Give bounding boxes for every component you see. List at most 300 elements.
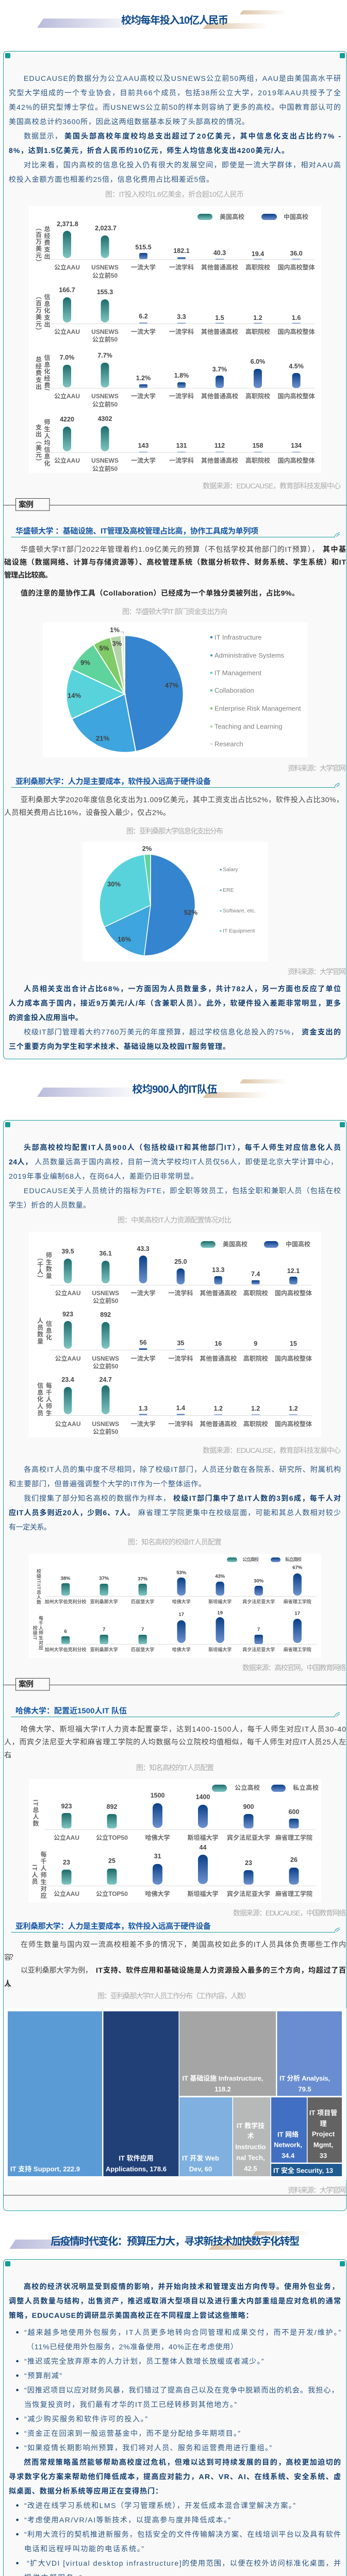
bars: IT staff per thousand: 1.2 <box>251 1405 260 1412</box>
bars: IT staff numbers: 923 <box>62 1311 73 1318</box>
bars: IT spending per person: 4220 <box>60 416 74 423</box>
legend: 美国高校 <box>220 213 244 221</box>
cell: software applications: IT 软件应用 <box>119 2155 154 2162</box>
bars: IT staff per thousand: 26 <box>290 1856 298 1863</box>
bars: IT staff numbers: 一流学科 <box>168 1354 193 1362</box>
bars: IT staff numbers: 人员数量 <box>37 1317 44 1345</box>
case divider: 案例 <box>19 1680 34 1689</box>
source note: 数据来源：EDUCAUSE，教育部科技发展中心 <box>203 482 341 490</box>
cell: infrastructure <box>179 2011 276 2096</box>
bullet list: coping strategies <box>16 2328 341 2452</box>
bars: total spending: 一流大学 <box>131 263 156 271</box>
bars: total spending: USNEWS <box>91 264 119 271</box>
bars: total spending: 36.0 <box>290 250 303 257</box>
chart caption: 图：知名高校的校级IT人员配置 <box>128 1538 222 1546</box>
bars: IT share of total spending <box>35 352 315 408</box>
bullet list: new technology uses: “改进在线学习系统和LMS（学习管理系统），开发低成本混合课堂解决方案。” <box>24 2501 295 2510</box>
intro text block: 数据显示， <box>24 132 62 140</box>
bars: IT share of total spending: 其他普通高校 <box>201 392 238 400</box>
case text: University of Washington: 值的注意的是协作工具（Collaboration）已经成为一个单独分类被列出，占比9%。 <box>21 589 299 597</box>
bars: central IT per thousand: 17 <box>178 1612 184 1618</box>
bars: IT staff per thousand: 1.4 <box>176 1404 185 1412</box>
cell: instructional tech: 术 <box>247 2132 254 2140</box>
staffing concentration text: 我们搜集了部分知名高校的数据作为样本， <box>24 1494 170 1502</box>
bars: total IT staff: 公立AAU <box>54 1834 79 1841</box>
bars: central IT share <box>36 1565 317 1605</box>
bars: IT share of total spending: 1.2% <box>136 375 151 382</box>
bars: total spending: 19.4 <box>252 250 264 258</box>
bars: IT share of total spending: 3.7% <box>212 366 227 373</box>
bars: IT staff numbers: 892 <box>100 1311 111 1318</box>
bars: IT staff per thousand: 国内高校整体 <box>275 1420 312 1428</box>
bars: total spending: 2,371.8 <box>57 221 78 228</box>
section heading: post-pandemic changes <box>9 2231 310 2250</box>
intro text block: 美42%的研究型博士学位。而USNEWS公立前50的样本则容纳了更多的高校。中国教育部认可的 <box>9 103 341 111</box>
bars: IT staff numbers: 信息化 <box>45 1320 52 1341</box>
bars: total IT staff <box>32 1792 317 1841</box>
bars: IT spending: 高职院校 <box>245 328 270 335</box>
pie legend: Salary <box>223 867 239 873</box>
bars: IT staff numbers: 56 <box>140 1339 147 1346</box>
intro text block: 高校的经济状况明显受到疫情的影响，并开始向技术和管理支出方向传导。使用外包业务， <box>24 2282 339 2291</box>
bullet list: coping strategies: “越来越多地使用外包服务，IT人员更多地转向合同管理和成果交付，而不是开发/维护。” <box>24 2328 341 2336</box>
bullet list: coping strategies: 当恢复投资时，我们最有才华的IT员工已经转移到其他地方。” <box>24 2400 237 2409</box>
bars: IT staff numbers: 公立AAU <box>55 1354 80 1362</box>
intro text block: 学生）折合的人员数量。 <box>9 1201 90 1209</box>
bars: IT spending: 公立AAU <box>54 328 80 335</box>
bars: staff and student numbers: USNEWS <box>92 1290 119 1297</box>
intro text block: EDUCAUSE关于人员统计的指标为FTE，即全职等效员工，包括全职和兼职人员（包括在校 <box>24 1187 341 1195</box>
chart: total IT staff at well-known universities <box>29 1779 321 1903</box>
pie legend: Teaching and Learning <box>214 722 283 731</box>
cell: software applications <box>103 2011 178 2176</box>
intro text block: 人员数量远高于国内高校，目前一流大学校均IT人员仅56人，即使是北京大学计算中心， <box>35 1158 338 1166</box>
section heading: 校均每年投入10亿人民币 <box>37 10 287 29</box>
source note: 资料来源：大学官网 <box>288 968 346 976</box>
bars: total spending: 公立AAU <box>54 263 80 271</box>
pie chart: University of Washington IT spending: 21% <box>96 735 109 742</box>
bullet list: new technology uses <box>16 2501 341 2576</box>
bars: total IT staff: 892 <box>107 1803 117 1810</box>
bars: IT spending: 166.7 <box>59 286 75 294</box>
chart: China vs US IT spending <box>29 206 321 473</box>
bars: total IT staff: IT总人数 <box>32 1800 39 1827</box>
bullet list: coping strategies: “资金正在回滚到一般运营基金中，而不是分配给多年期项目。” <box>24 2429 240 2437</box>
pie chart: University of Washington IT spending: 47% <box>165 681 178 689</box>
legend <box>212 1784 319 1792</box>
bars: IT spending <box>35 286 315 343</box>
bars: IT spending per person: 一流学科 <box>169 456 194 464</box>
bars: IT spending: 1.6 <box>292 314 301 321</box>
bars: total spending: 高职院校 <box>245 263 270 271</box>
cell: project management <box>307 2097 342 2163</box>
case text: Harvard: 人，而宾夕法尼亚大学和麻省理工学院的人均数据与公立院校均值相似，每千人师生对应IT人员25人左 <box>4 1738 346 1746</box>
intro text block: 校投入金额方面也相差约25倍，信息化费用占比相差近5倍。 <box>9 175 213 183</box>
bars: IT staff per thousand: 斯坦福大学 <box>187 1890 219 1897</box>
bars: central IT per thousand: 加州大学伯克利分校 <box>44 1647 87 1652</box>
case text: University of Arizona staffing <box>4 1940 346 1988</box>
pie chart: University of Washington IT spending <box>43 622 307 757</box>
pie chart: University of Washington IT spending: 3% <box>112 640 122 647</box>
case heading: University of Washington <box>11 527 340 537</box>
staffing concentration text: 各高校IT人员的集中度不尽相同，除了校级IT部门，人员还分散在各院系、研究所、附属机构 <box>24 1465 341 1473</box>
pie chart: University of Arizona IT spending: 16% <box>118 936 131 943</box>
bars: total IT staff: 1400 <box>196 1793 210 1801</box>
bars: central IT per thousand: 7 <box>257 1627 260 1632</box>
bars: IT staff per thousand: IT人员 <box>31 1865 38 1885</box>
pie chart: University of Washington IT spending: 14% <box>68 691 81 700</box>
bars: IT staff numbers: 15 <box>290 1340 297 1347</box>
bars: IT staff per thousand: 信息化人员 <box>37 1382 44 1417</box>
bars: IT staff numbers: 一流大学 <box>131 1354 156 1362</box>
cell: instructional tech: IT 教学技 <box>237 2122 265 2130</box>
text block: digital solutions <box>9 2458 341 2495</box>
pie legend: IT Management <box>214 669 261 677</box>
intro text block <box>9 1143 341 1209</box>
bullet list: coping strategies: “如果疫情长期影响州预算，我们将对人员、服务和运营费用进行重组。” <box>24 2444 272 2452</box>
intro text block <box>9 2282 341 2319</box>
section heading: 校均900人的IT队伍 <box>37 1079 287 1098</box>
bars: total spending: 一流学科 <box>169 263 194 271</box>
bars: IT staff per thousand: 麻省理工学院 <box>275 1890 312 1897</box>
intro text block: 美国高校总计约3600所，因此这两组数据基本反映了头部高校的情况。 <box>9 117 249 126</box>
case text: University of Arizona <box>4 795 343 817</box>
case text: University of Arizona: 亚利桑那大学2020年度信息化支出为1.009亿美元，其中工资支出占比52%，软件投入占比30%， <box>21 795 343 804</box>
bars: total IT staff: 1500 <box>151 1792 165 1799</box>
cell: project management: 理 <box>320 2120 327 2128</box>
bars: IT spending: （百万美元） <box>35 293 42 334</box>
bars: IT staff per thousand: 高职院校 <box>243 1420 268 1428</box>
bars: total IT staff: 哈佛大学 <box>145 1834 170 1841</box>
pie chart: University of Arizona IT spending: 30% <box>107 880 121 888</box>
cell: infrastructure: IT 基础设施 Infrastructure, <box>183 2074 263 2082</box>
staffing concentration text <box>9 1465 341 1531</box>
bars: central IT per thousand: 17 <box>294 1611 300 1617</box>
bars: IT share of total spending: 公立前50 <box>92 400 118 408</box>
legend <box>197 213 308 221</box>
pie legend: IT Equipment <box>223 928 255 934</box>
bars: IT staff per thousand <box>37 1376 312 1435</box>
cell: project management: 33 <box>320 2151 327 2160</box>
case text: University of Arizona staffing: 在师生数量与国内双一流高校相差不多的情况下，美国高校如此多的IT人员具体负责哪些工作内 <box>21 1940 346 1948</box>
bars: central IT share: 匹兹堡大学 <box>131 1599 154 1604</box>
intro text block: 24人， <box>9 1158 32 1166</box>
bars: central IT share: 30% <box>254 1579 264 1584</box>
chart caption: 图：知名高校的IT人员配置 <box>136 1764 214 1772</box>
bars: IT spending: 信息化支出 <box>43 293 51 328</box>
case heading: University of Arizona staffing <box>11 1922 340 1932</box>
bars: IT staff per thousand: 1.3 <box>139 1405 147 1412</box>
intro text block: 美国头部高校年度校均总支出超过了20亿美元，其中信息化支出占比约7% - <box>64 132 341 140</box>
bars: central IT share: 哈佛大学 <box>172 1599 191 1604</box>
chart caption: 图：华盛顿大学IT 部门资金支出方向 <box>122 607 227 616</box>
bars: central IT per thousand: 7 <box>103 1627 105 1632</box>
case heading: University of Arizona: 亚利桑那大学：人力是主要成本，软件投入远高于硬件设备 <box>15 777 211 786</box>
bullet list: coping strategies: “推迟或完全放弃原本的人力计划，员工整体人数增长放缓或者减少。” <box>24 2357 264 2365</box>
text block: digital solutions: 寻求数字化方案来帮助他们降低成本，提高应对能力，AR、VR、AI、在线系统、安全系统、虚 <box>9 2472 341 2481</box>
pie legend: Collaboration <box>214 686 254 694</box>
source note: 资料来源：大学官网 <box>288 2186 346 2194</box>
bars: total spending: 2,023.7 <box>95 225 117 232</box>
chart caption: 图：IT投入校均1.6亿美金，折合超10亿人民币 <box>105 190 244 198</box>
bars: IT share of total spending: 4.5% <box>289 363 304 370</box>
cell: project management: Project <box>312 2130 335 2138</box>
bars: IT spending per person: 国内高校整体 <box>278 456 315 464</box>
bars: IT spending per person: USNEWS <box>91 457 119 464</box>
cell: web development: IT 开发 Web <box>182 2155 219 2162</box>
staffing concentration text: 校级IT部门集中了总IT人数的3到6成，每千人对 <box>173 1494 341 1502</box>
case text: University of Arizona staffing: 以亚利桑那大学为例， <box>21 1966 92 1974</box>
pie legend: Research <box>214 740 243 748</box>
bars: central IT share: 53% <box>176 1570 187 1575</box>
legend: 公立高校 <box>235 1784 260 1791</box>
bars: IT staff per thousand: 44 <box>200 1844 206 1851</box>
case conclusion text: 人员相关支出合计占比68%，一方面因为人员数量多，共计782人，另一方面也反应了单位 <box>24 985 341 993</box>
cell: IT support <box>8 2011 102 2176</box>
bars: IT spending per person: 134 <box>291 442 302 449</box>
bars: central IT per thousand: 亚利桑那大学 <box>90 1647 118 1652</box>
bars: IT share of total spending: 一流学科 <box>169 392 194 400</box>
bars: staff and student numbers: 39.5 <box>61 1248 74 1255</box>
staffing concentration text: 有一定关系。 <box>9 1523 51 1531</box>
legend: 中国高校 <box>284 213 308 221</box>
bars: IT staff per thousand: 公立TOP50 <box>96 1890 128 1897</box>
case text: Harvard: 右。 <box>4 1751 15 1759</box>
bullet list: new technology uses: “利用大流行的契机推进新服务，包括安全的文件传输解决方案、在线培训平台以及具有软件 <box>24 2530 341 2538</box>
cell: web development <box>179 2097 232 2176</box>
bars: IT share of total spending: 7.7% <box>97 352 112 359</box>
case divider: 案例 <box>19 500 34 509</box>
bars: IT staff per thousand: 其他普通高校 <box>200 1420 237 1428</box>
bars: central IT share: 37% <box>99 1575 109 1582</box>
bars: central IT share: 麻省理工学院 <box>284 1599 311 1604</box>
intro text block: 对比来看，国内高校的信息化投入仍有很大的发展空间，即使是一流大学群体，相对AAU高 <box>24 161 341 169</box>
pie chart: University of Washington IT spending: 9% <box>80 658 90 667</box>
cell: project management: Mgmt, <box>313 2141 333 2148</box>
bars: IT staff per thousand: 宾夕法尼亚大学 <box>227 1890 270 1897</box>
bars: central IT share: 加州大学伯克利分校 <box>44 1599 87 1604</box>
cell: project management: IT 项目管 <box>309 2109 337 2116</box>
bars: IT share of total spending: 高职院校 <box>245 392 270 400</box>
staffing concentration text: 麻省理工学院更集中在校级层面，可能和其总人数相对较少 <box>138 1509 341 1517</box>
source note: 数据来源：EDUCAUSE，教育部科技发展中心 <box>203 1446 341 1454</box>
section heading: 校均900人的IT队伍: 校均900人的IT队伍 <box>132 1083 218 1095</box>
bars: total IT staff: 公立TOP50 <box>96 1834 128 1841</box>
bars: central IT per thousand: 匹兹堡大学 <box>131 1647 154 1652</box>
bars: IT staff per thousand: 哈佛大学 <box>145 1890 170 1897</box>
bars: IT spending: 公立前50 <box>92 335 118 343</box>
bars: total spending: 40.3 <box>213 249 226 257</box>
bars: IT staff per thousand: 一流学科 <box>168 1420 193 1428</box>
bars: central IT per thousand: 哈佛大学 <box>172 1647 191 1652</box>
bars: IT staff per thousand: 公立前50 <box>93 1428 119 1435</box>
bars: IT staff per thousand: 公立AAU <box>55 1420 80 1428</box>
source note: 数据来源：EDUCAUSE，中国教育网络 <box>233 1909 346 1917</box>
bars: IT share of total spending: 公立AAU <box>54 392 80 400</box>
bars: central IT per thousand: 麻省理工学院 <box>284 1647 311 1652</box>
bars: central IT share: 37% <box>138 1577 148 1582</box>
cell: analysis: 79.5 <box>298 2086 311 2093</box>
bars: staff and student numbers: 师生数量 <box>45 1252 52 1279</box>
bars: IT spending: 1.5 <box>215 314 224 321</box>
pie legend: ERE <box>223 887 234 893</box>
bars: total spending: 182.1 <box>173 247 190 255</box>
bars: total spending: 其他普通高校 <box>201 263 238 271</box>
pie chart: University of Arizona IT spending <box>82 842 268 961</box>
bars: staff and student numbers: 25.0 <box>174 1258 187 1265</box>
case divider <box>3 499 346 511</box>
bars: central IT share: 67% <box>292 1565 303 1570</box>
bars: IT staff per thousand: 25 <box>108 1857 115 1865</box>
legend: 中国高校 <box>286 1240 310 1248</box>
bars: central IT per thousand: 校级IT <box>32 1625 38 1640</box>
bars: IT spending per person: 其他普通高校 <box>201 456 238 464</box>
bars: IT spending: 一流大学 <box>131 328 156 335</box>
bars: IT spending per person: 公立AAU <box>54 456 80 464</box>
bars: IT share of total spending: 7.0% <box>60 354 74 361</box>
bars: IT spending: USNEWS <box>91 328 119 335</box>
bars: IT spending: 155.3 <box>97 289 113 296</box>
bullet list: new technology uses: “考虑使用AR/VR/AI等新技术，以提高参与度并降低成本。” <box>24 2516 230 2524</box>
case conclusion text <box>9 985 341 1050</box>
legend: 私立高校 <box>285 1556 302 1562</box>
bars: total spending <box>35 221 315 279</box>
bars: total spending: （百万美元） <box>35 225 42 266</box>
bars: IT staff per thousand: 1.2 <box>214 1405 223 1412</box>
case text: Harvard: 哈佛大学、斯坦福大学IT人力资本配置豪华，达到1400-1500人，每千人师生对应IT人员30-40 <box>21 1725 346 1733</box>
bars: IT staff numbers: 16 <box>214 1340 222 1347</box>
cell: instructional tech: Instructio <box>235 2143 266 2150</box>
case conclusion text: 的资金投入应用当中。 <box>9 1013 82 1022</box>
bars: IT spending per person: 支出（美元） <box>35 423 42 465</box>
intro text block: 调整人员数量与结构，出售资产，推迟或取消大型项目以及进行重大内部重组是应对危机的通常 <box>9 2297 341 2305</box>
bars: IT share of total spending: 总经费支出 <box>35 355 42 391</box>
bars: IT staff numbers: USNEWS <box>92 1355 119 1362</box>
pie legend <box>220 867 256 934</box>
intro text block: 究型大学组成的一个专业协会，目前共66个成员，包括38所公立大学，2019年AAU共授予了全 <box>9 89 341 97</box>
source note: 资料来源：大学官网 <box>288 764 346 772</box>
bars: total IT staff: 923 <box>61 1803 72 1810</box>
case heading: University of Washington: 华盛顿大学 ：基础设施、IT管理及高校管理占比高，协作工具成为单列项 <box>15 527 258 536</box>
bars: staff and student numbers: 一流学科 <box>168 1289 193 1297</box>
cell: network: 34.4 <box>282 2151 295 2160</box>
bars: total spending: 总经费支出 <box>43 225 51 260</box>
bars: IT spending: 其他普通高校 <box>201 328 238 335</box>
bars: IT staff per thousand: 1.2 <box>289 1405 298 1412</box>
pie chart: University of Washington IT spending: 5% <box>100 644 109 652</box>
bars: staff and student numbers: 36.1 <box>100 1250 112 1257</box>
bars: IT share of total spending: 一流大学 <box>131 392 156 400</box>
bars: IT spending per person: 143 <box>138 442 148 449</box>
legend <box>201 1240 310 1248</box>
cell: security: IT 安全 Security, 13 <box>273 2167 333 2174</box>
bars: IT staff per thousand: USNEWS <box>92 1420 119 1428</box>
bars: IT staff numbers: 35 <box>177 1340 184 1347</box>
bars: IT staff per thousand: 24.7 <box>100 1376 112 1383</box>
cell: IT support: IT 支持 Support, 222.9 <box>10 2165 80 2173</box>
bars: IT staff per thousand: 23 <box>245 1859 252 1867</box>
staffing concentration text: 应IT人员多则近20人，少则6、7人。 <box>9 1509 135 1517</box>
bars: total IT staff: 麻省理工学院 <box>275 1834 312 1841</box>
bars: central IT per thousand: 斯坦福大学 <box>208 1647 232 1652</box>
case conclusion text: 校级IT部门管理着大约7760万美元的年度预算，超过学校信息化总投入的75%， <box>24 1028 298 1036</box>
bars: IT spending per person: 131 <box>176 442 187 449</box>
bars: total spending: 公立前50 <box>92 272 118 279</box>
cell: instructional tech <box>233 2097 270 2176</box>
bars: central IT per thousand: 19 <box>217 1611 223 1616</box>
bars: IT spending per person: 4302 <box>98 415 112 422</box>
bullet list: coping strategies: “因推迟项目以应对财务风暴，我们错过了提高自己以及在竞争中脱颖而出的机会。我担心， <box>24 2386 338 2394</box>
bars: IT staff per thousand: 每千人师生对应 <box>40 1851 47 1899</box>
bullet list: coping strategies: “预算削减” <box>24 2371 62 2380</box>
bars: staff and student numbers: 公立AAU <box>55 1289 80 1297</box>
intro text block: EDUCAUSE的数据分为公立AAU高校以及USNEWS公立前50两组，AAU是由美国高水平研 <box>24 74 341 82</box>
bars: IT staff numbers: 高职院校 <box>243 1354 268 1362</box>
case text: University of Washington <box>4 545 346 597</box>
source note: 数据来源：高校官网，中国教育网络 <box>242 1664 346 1672</box>
text block: digital solutions: 拟桌面、数据分析系统等应用正在变得热门： <box>9 2487 162 2495</box>
bars: IT share of total spending: 1.8% <box>174 372 189 379</box>
case heading: University of Arizona <box>11 777 340 787</box>
bars: central IT share: 宾夕法尼亚大学 <box>242 1599 275 1604</box>
intro text block: 2019年事业编制68人，在岗64人，差距仍旧非常明显。 <box>9 1172 198 1180</box>
case heading: University of Arizona staffing: 亚利桑那大学：人力是主要成本，软件投入远高于硬件设备 <box>15 1922 211 1931</box>
intro text block: 策略，EDUCAUSE的调研显示美国高校正在不同程度上尝试这些策略： <box>9 2311 253 2319</box>
case heading: Harvard: 哈佛大学：配置近1500人IT 队伍 <box>15 1706 127 1716</box>
case text: University of Arizona staffing: 容？ <box>4 1953 17 1961</box>
bars: IT spending: 1.2 <box>253 314 262 321</box>
bars: IT staff per thousand: 公立AAU <box>54 1890 79 1897</box>
bars: central IT share: 校级IT/IT总人数 <box>36 1568 41 1605</box>
bars: IT staff per thousand: 每千人师生 <box>45 1382 52 1417</box>
intro text block <box>9 74 341 183</box>
case divider <box>3 1679 346 1690</box>
bars: IT spending: 3.3 <box>177 313 186 320</box>
bars: staff and student numbers: 7.4 <box>251 1270 260 1278</box>
intro text block: 8%，达到1.5亿美元，折合人民币约10亿元，师生人均信息化支出4200美元/人。 <box>9 146 289 155</box>
panel: IT investment <box>3 52 346 1059</box>
bars: IT spending per person: 158 <box>253 442 263 449</box>
bars: total spending: 国内高校整体 <box>278 263 315 271</box>
cell: network: IT 网络 <box>277 2131 299 2138</box>
panel: post-pandemic changes <box>3 2260 346 2576</box>
bars: central IT share: 斯坦福大学 <box>208 1599 232 1604</box>
cell: web development: Dev, 60 <box>189 2165 212 2173</box>
legend <box>227 1556 302 1562</box>
cell: instructional tech: 42.5 <box>244 2165 257 2172</box>
bars: IT staff numbers: 9 <box>254 1340 257 1347</box>
chart caption: 图：亚利桑那大学信息化支出分布 <box>126 827 223 835</box>
cell: infrastructure: 118.2 <box>214 2086 231 2093</box>
bars: IT share of total spending: USNEWS <box>91 393 119 400</box>
bars: staff and student numbers: 12.1 <box>287 1267 300 1275</box>
panel: IT staffing <box>3 1120 346 2211</box>
bars: total spending: 515.5 <box>135 244 152 251</box>
bars: central IT share: 38% <box>60 1575 71 1582</box>
legend: 私立高校 <box>293 1784 319 1791</box>
bars: IT spending per person: 一流大学 <box>131 456 156 464</box>
pie chart: University of Washington IT spending: 1% <box>110 626 120 634</box>
section heading: 校均每年投入10亿人民币: 校均每年投入10亿人民币 <box>121 14 228 26</box>
case conclusion text: 资金支出的 <box>302 1028 341 1036</box>
chart caption: 图：中美高校IT人力资源配置情况对比 <box>118 1216 232 1224</box>
bars: IT spending per person: 公立前50 <box>92 465 118 472</box>
bars: IT share of total spending: 6.0% <box>251 358 265 365</box>
pie legend: IT Infrastructure <box>214 634 262 641</box>
pie chart: University of Arizona IT spending: 52% <box>184 909 197 916</box>
bars: staff and student numbers: 国内高校整体 <box>275 1289 312 1297</box>
bars: total IT staff: 宾夕法尼亚大学 <box>227 1834 270 1841</box>
